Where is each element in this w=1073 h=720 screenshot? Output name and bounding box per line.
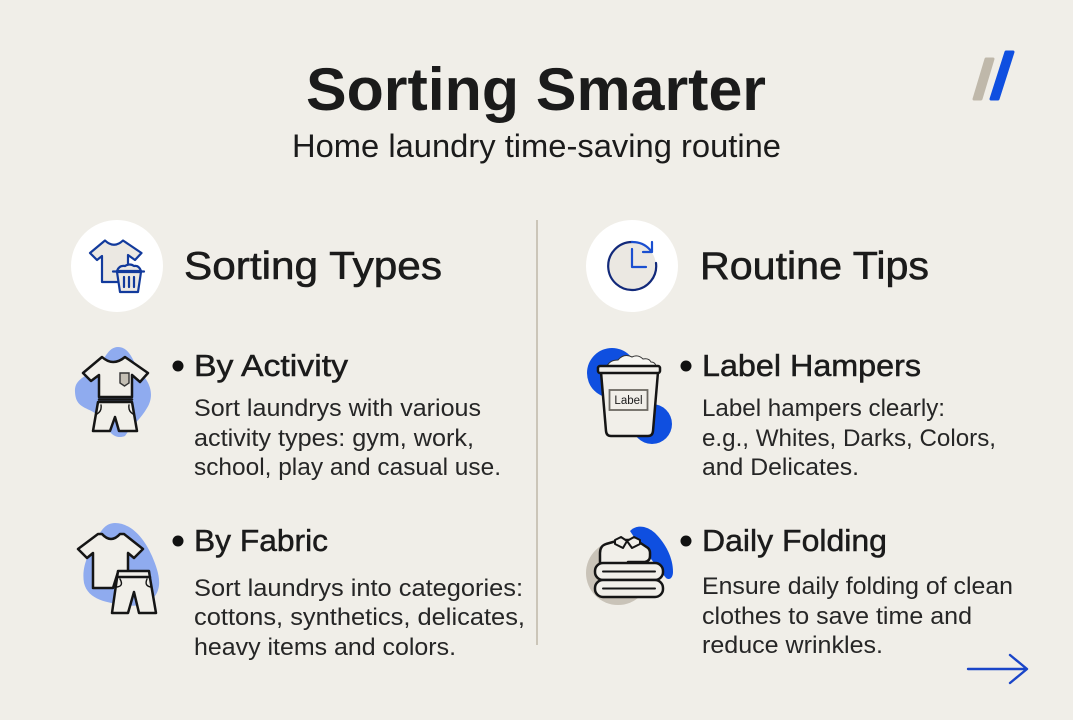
heading: sorting types: Sorting Types (184, 245, 442, 288)
item text: e.g., Whites, Darks, Colors, (702, 425, 996, 452)
icon: shirt and basket (71, 220, 163, 312)
icon: logo slashes (974, 52, 1013, 99)
icon: folded clothes (586, 527, 673, 605)
item text: heavy items and colors. (194, 634, 456, 661)
item text: cottons, synthetics, delicates, (194, 604, 525, 631)
heading: routine tips: Routine Tips (700, 245, 929, 288)
item: label hampers (587, 348, 996, 481)
bullet (680, 536, 692, 546)
item text: Sort laundrys into categories: (194, 575, 523, 602)
item heading: Daily Folding (702, 523, 887, 558)
icon: shirt and shorts (78, 523, 159, 613)
item heading: Label Hampers (702, 348, 921, 383)
item text (702, 395, 996, 481)
icon: labelled hamper (587, 348, 672, 444)
item text: Sort laundrys with various (194, 395, 481, 422)
bullet (172, 536, 184, 546)
item: by fabric (78, 523, 525, 661)
title: Sorting Smarter (306, 56, 766, 123)
item text: school, play and casual use. (194, 454, 501, 481)
panel: sorting types (71, 220, 525, 661)
panel: routine tips (586, 220, 1013, 659)
item: daily folding (586, 523, 1013, 659)
item text: clothes to save time and (702, 603, 972, 630)
item text (702, 573, 1013, 659)
item text: Label hampers clearly: (702, 395, 945, 422)
item text: reduce wrinkles. (702, 632, 883, 659)
item text (194, 395, 501, 481)
item text: Ensure daily folding of clean (702, 573, 1013, 600)
subtitle: Home laundry time-saving routine (292, 128, 781, 164)
item: by activity (75, 347, 501, 481)
bullet (172, 360, 184, 372)
item text: activity types: gym, work, (194, 425, 474, 452)
item text: and Delicates. (702, 454, 859, 481)
arrow (968, 655, 1027, 683)
item text (194, 575, 525, 661)
bullet (680, 360, 692, 372)
item heading: By Activity (194, 348, 349, 383)
icon: activity outfit (75, 347, 151, 437)
icon: clock with arrow (586, 220, 678, 312)
icon: labelled hamper: Label (614, 395, 643, 407)
item heading: By Fabric (194, 523, 328, 558)
